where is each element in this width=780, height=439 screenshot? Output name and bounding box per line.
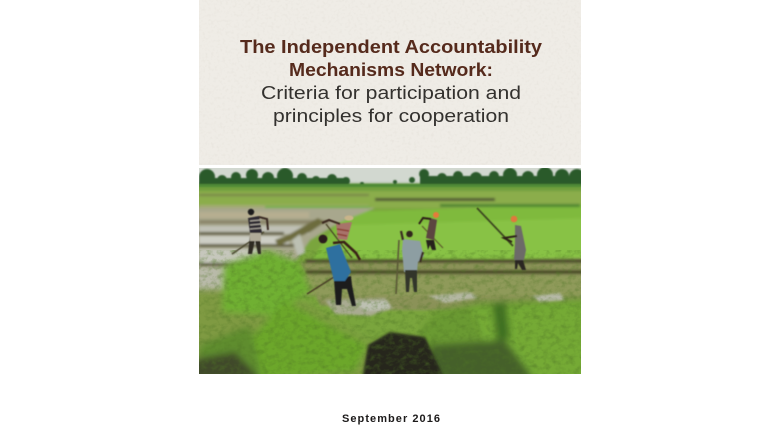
far bushes	[199, 182, 581, 190]
panel: title background	[199, 0, 581, 165]
farmers	[232, 208, 526, 306]
heading: network name	[240, 36, 543, 80]
heading: network name: Mechanisms Network:	[289, 59, 493, 80]
farmer: pale shirt with tool	[396, 231, 424, 294]
far fields	[190, 191, 590, 208]
subtitle	[261, 82, 521, 126]
subtitle: principles for cooperation	[273, 105, 509, 126]
farmer: bending, red striped shirt	[322, 215, 354, 258]
muddy middle ground	[300, 258, 590, 310]
farmer: orange cap, in rice	[419, 212, 443, 250]
date: September 2016	[342, 413, 440, 425]
left flooded terraces	[190, 208, 375, 298]
foreground grass and ditch	[190, 250, 590, 380]
ditch and water patches	[325, 292, 565, 380]
farmer: striped shirt, left	[232, 209, 268, 254]
farmer: blue vest, foreground	[307, 235, 360, 306]
photo: farmers working in a rice paddy	[199, 168, 581, 374]
tree line	[199, 167, 585, 187]
farmer: long pole, right	[477, 208, 526, 270]
right green rice field	[310, 204, 590, 262]
subtitle: Criteria for participation and	[261, 82, 521, 103]
sky	[199, 168, 581, 185]
heading: network name: The Independent Accountability	[240, 36, 543, 57]
title	[240, 36, 543, 126]
grass texture	[199, 250, 581, 374]
